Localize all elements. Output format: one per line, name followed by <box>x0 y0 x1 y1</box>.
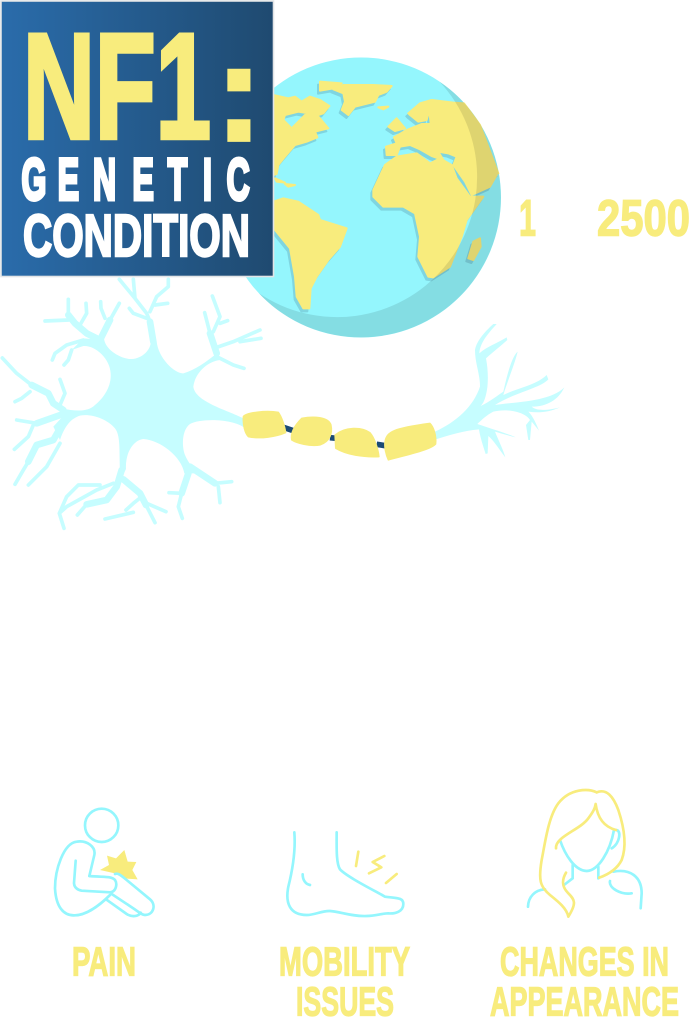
myelin sheath <box>243 411 436 460</box>
subtitle: condition: CONDITION <box>23 203 250 269</box>
label: mobility issues <box>279 938 410 1020</box>
title panel <box>1 1 274 276</box>
continents <box>271 82 498 311</box>
label: mobility issues: MOBILITY <box>279 938 410 984</box>
subtitle: genetic: GENETIC <box>21 147 250 212</box>
title: NF1:: NF1 <box>23 2 211 170</box>
neuron <box>2 279 564 528</box>
title: NF1:: : <box>216 17 262 170</box>
statistic: 1 in 2500: 1 <box>519 190 536 246</box>
globe <box>221 58 501 338</box>
icon: woman <box>528 790 642 917</box>
label: changes in appearance <box>490 938 679 1020</box>
icon: foot <box>287 832 403 916</box>
symptom: changes in appearance <box>490 790 679 1020</box>
symptom: mobility issues <box>279 832 410 1020</box>
label: pain: PAIN <box>72 938 136 984</box>
icon: person in pain <box>55 809 154 916</box>
symptom: pain <box>55 809 154 984</box>
neuron cell body and dendrites <box>2 279 261 528</box>
axon terminal <box>435 324 564 457</box>
globe shadow <box>259 82 501 337</box>
statistic: 1 in 2500 <box>519 190 690 246</box>
